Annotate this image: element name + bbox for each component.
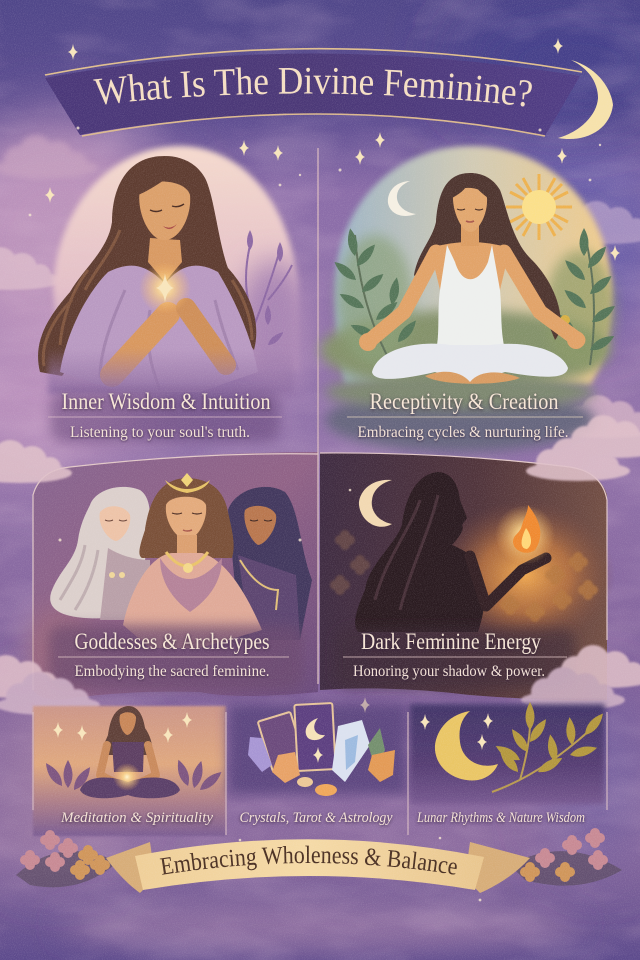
icon: right flowers [510, 828, 622, 886]
moon arch [53, 146, 298, 385]
label: Crystals, Tarot & Astrology [240, 810, 393, 826]
figure: white-haired goddess [50, 487, 150, 620]
sparkle dots [29, 126, 601, 901]
title: What Is The Divine Feminine? [93, 67, 532, 106]
clouds [0, 135, 640, 438]
icon: stars top [45, 38, 620, 261]
arch [335, 146, 612, 385]
icon: branch [492, 702, 606, 792]
label backdrop [50, 392, 280, 442]
icon: flowers [330, 530, 598, 622]
divider [317, 452, 319, 684]
woman figure [38, 156, 258, 392]
icon: flame [495, 505, 555, 565]
figure: crowned goddess [123, 473, 262, 648]
icon: flowers [225, 230, 292, 360]
icon: crescent [435, 711, 498, 780]
text: Embodying the sacred feminine. [74, 663, 270, 680]
label backdrop [335, 628, 575, 688]
panel: lunar rhythms [410, 702, 606, 826]
dividers [33, 712, 607, 835]
label backdrop [48, 625, 303, 690]
panel: receptivity [320, 146, 618, 452]
figure: dark-haired goddess [228, 487, 312, 640]
panel: meditation [33, 706, 226, 836]
icon: moon [388, 181, 416, 216]
stars row 3 [360, 697, 493, 750]
icon: tarot card back [258, 712, 305, 771]
icon: crescent moon [558, 60, 613, 139]
bottom fade [48, 348, 294, 394]
figure: silhouette [355, 472, 546, 632]
clouds [0, 415, 640, 715]
text: Honoring your shadow & power. [353, 663, 545, 680]
panel: crystals tarot astrology [228, 703, 407, 826]
heading: Inner Wisdom & Intuition [62, 389, 271, 414]
slogan: Embracing Wholeness & Balance [160, 846, 457, 875]
label: Lunar Rhythms & Nature Wisdom [416, 810, 585, 826]
ribbon banner [106, 839, 530, 893]
title banner [44, 48, 582, 137]
heading: Dark Feminine Energy [361, 629, 541, 654]
panel: inner wisdom [38, 146, 313, 442]
icon: crystals [248, 720, 395, 796]
icon: left flowers [16, 830, 118, 887]
panel: goddesses [28, 452, 318, 700]
panel: dark feminine [320, 453, 615, 700]
heading: Goddesses & Archetypes [74, 629, 270, 654]
icon: moon [359, 480, 392, 527]
icon: sun [506, 174, 572, 240]
label: Meditation & Spirituality [60, 810, 213, 826]
divider [317, 148, 319, 452]
text: Listening to your soul's truth. [70, 424, 250, 441]
text: Embracing cycles & nurturing life. [358, 424, 568, 441]
woman figure [359, 173, 585, 384]
icon: plants [332, 228, 618, 370]
heading: Receptivity & Creation [370, 389, 559, 414]
icon: tarot card moon [294, 703, 336, 771]
icon: leaves [42, 758, 224, 793]
figure: meditating woman [80, 706, 180, 798]
